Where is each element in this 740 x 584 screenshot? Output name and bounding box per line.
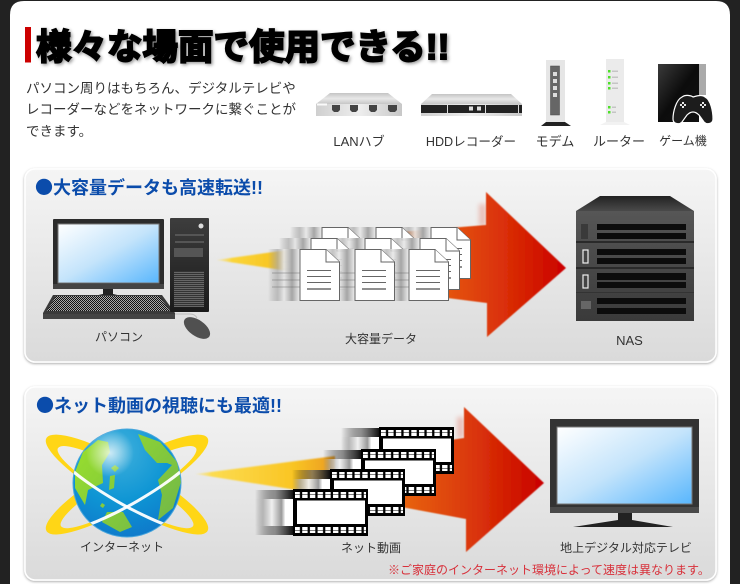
heading: net video viewing: ●ネット動画の視聴にも最適!! [36,392,282,418]
panel: large data transfer [25,169,716,362]
label: game console: ゲーム機 [659,134,707,148]
icon: HDD recorder [421,94,522,116]
icon: mouse [175,313,214,343]
icon: PC tower [170,218,209,312]
icon: controller [673,95,713,124]
beam: yellow from PC [216,249,295,272]
icon: globe with orbits [46,428,208,538]
label: HDD recorder: HDDレコーダー [426,135,516,149]
label: PC: パソコン [95,330,143,344]
label: router: ルーター [593,134,645,149]
icon: NAS [576,196,694,321]
label: large data: 大容量データ [345,331,417,346]
label: digital TV: 地上デジタル対応テレビ [560,540,692,555]
arrow: data transfer red [400,192,566,337]
heading: large data transfer: ●大容量データも高速転送!! [35,174,263,200]
icon: LAN hub [316,93,402,116]
icon: desktop monitor [53,219,164,296]
panel: net video viewing [25,387,716,580]
data files stack [268,227,470,301]
icon: digital TV [550,419,699,527]
label: LAN hub: LANハブ [333,134,385,149]
icon: modem [541,60,571,126]
intro text: パソコン周りはもちろん、デジタルテレビや [26,80,296,96]
label: NAS: NAS [616,333,643,348]
icon: keyboard [43,295,175,319]
intro text: レコーダーなどをネットワークに繋ぐことが [26,102,296,117]
footnote: ※ご家庭のインターネット環境によって速度は異なります。 [388,562,710,577]
icon: router [600,59,630,125]
arrow: video transfer red [380,407,544,552]
title [25,27,449,67]
label: internet: インターネット [80,540,164,554]
title accent bar [25,27,31,62]
label: net video: ネット動画 [341,541,401,555]
label: modem: モデム [536,134,574,149]
intro text: できます。 [26,124,92,139]
intro text [26,80,296,139]
film strips [255,427,454,536]
icon: game console [658,64,713,124]
beam: yellow from internet [195,456,335,496]
title text: 様々な場面で使用できる!! [36,27,449,67]
